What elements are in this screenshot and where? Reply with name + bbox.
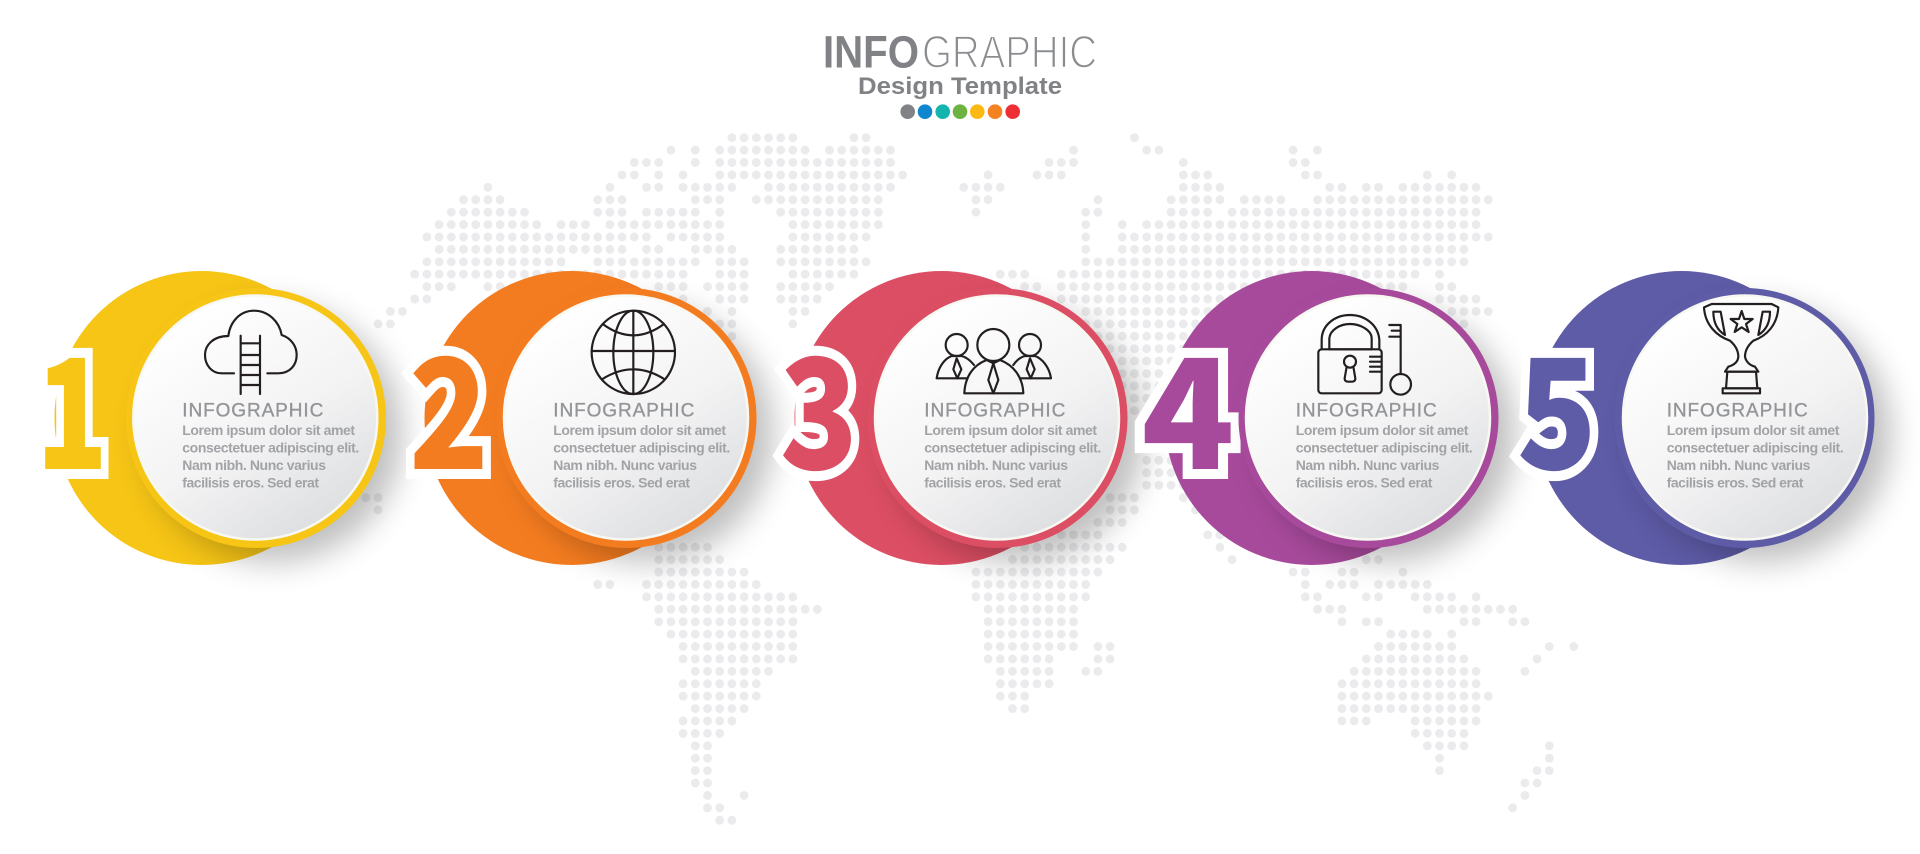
text block: consectetuer adipiscing elit.	[182, 440, 359, 456]
title word: INFO: INFO	[823, 26, 919, 78]
large orange circle	[424, 271, 718, 565]
text block	[924, 401, 1101, 490]
indigo ring circle	[1614, 288, 1874, 548]
number 4: 4	[1141, 293, 1235, 514]
shadow	[146, 306, 402, 562]
step 1: yellow	[36, 271, 402, 565]
text block: Nam nibh. Nunc varius	[182, 457, 326, 473]
icon: padlock and key	[1318, 315, 1411, 395]
text block: facilisis eros. Sed erat	[553, 474, 690, 490]
white disc	[504, 296, 748, 540]
purple ring circle	[1238, 288, 1498, 548]
subtitle: Design Template	[858, 73, 1062, 100]
orange ring circle	[496, 288, 756, 548]
text block	[1667, 401, 1844, 490]
text block: consectetuer adipiscing elit.	[924, 440, 1101, 456]
text block: INFOGRAPHIC	[1667, 401, 1808, 422]
icon: globe	[592, 311, 675, 394]
white disc	[875, 296, 1119, 540]
yellow ring circle	[126, 288, 386, 548]
text block: Lorem ipsum dolor sit amet	[1667, 422, 1840, 438]
text block: facilisis eros. Sed erat	[924, 474, 1061, 490]
text block	[182, 401, 359, 490]
shadow	[517, 306, 773, 562]
step 3: red	[780, 271, 1144, 565]
text block: Nam nibh. Nunc varius	[1667, 457, 1811, 473]
text block: INFOGRAPHIC	[924, 401, 1065, 422]
text block: Nam nibh. Nunc varius	[924, 457, 1068, 473]
text block: INFOGRAPHIC	[553, 401, 694, 422]
number 1: 1	[36, 293, 108, 514]
white disc	[133, 296, 377, 540]
large indigo circle	[1534, 271, 1828, 565]
icon: cloud ladder	[205, 311, 297, 394]
title	[823, 26, 1097, 119]
text block: Nam nibh. Nunc varius	[553, 457, 697, 473]
large yellow circle	[54, 271, 348, 565]
number 2: 2	[409, 293, 489, 514]
text block: Lorem ipsum dolor sit amet	[182, 422, 355, 438]
title word: GRAPHIC: GRAPHIC	[922, 26, 1097, 78]
icon: team of people	[937, 329, 1051, 393]
white disc	[1246, 296, 1490, 540]
step 4: purple	[1141, 271, 1515, 565]
text block: INFOGRAPHIC	[182, 401, 323, 422]
colour dots	[900, 104, 1020, 119]
shadow	[1259, 306, 1515, 562]
large purple circle	[1164, 271, 1458, 565]
text block: Lorem ipsum dolor sit amet	[1296, 422, 1469, 438]
large red circle	[794, 271, 1088, 565]
text block: consectetuer adipiscing elit.	[553, 440, 730, 456]
text block: Lorem ipsum dolor sit amet	[924, 422, 1097, 438]
number 3: 3	[780, 293, 858, 514]
red ring circle	[868, 288, 1128, 548]
text block: INFOGRAPHIC	[1296, 401, 1437, 422]
number 5: 5	[1517, 293, 1597, 514]
text block: facilisis eros. Sed erat	[1667, 474, 1804, 490]
text block: facilisis eros. Sed erat	[1296, 474, 1433, 490]
text block: consectetuer adipiscing elit.	[1667, 440, 1844, 456]
shadow	[888, 306, 1144, 562]
white disc	[1623, 296, 1867, 540]
text block: consectetuer adipiscing elit.	[1296, 440, 1473, 456]
text block: Lorem ipsum dolor sit amet	[553, 422, 726, 438]
step 5: indigo	[1517, 271, 1891, 565]
text block: Nam nibh. Nunc varius	[1296, 457, 1440, 473]
step 2: orange	[409, 271, 773, 565]
icon: trophy	[1704, 304, 1778, 393]
text block	[1296, 401, 1473, 490]
dotted world map	[366, 138, 1574, 820]
text block: facilisis eros. Sed erat	[182, 474, 319, 490]
text block	[553, 401, 730, 490]
shadow	[1635, 306, 1891, 562]
